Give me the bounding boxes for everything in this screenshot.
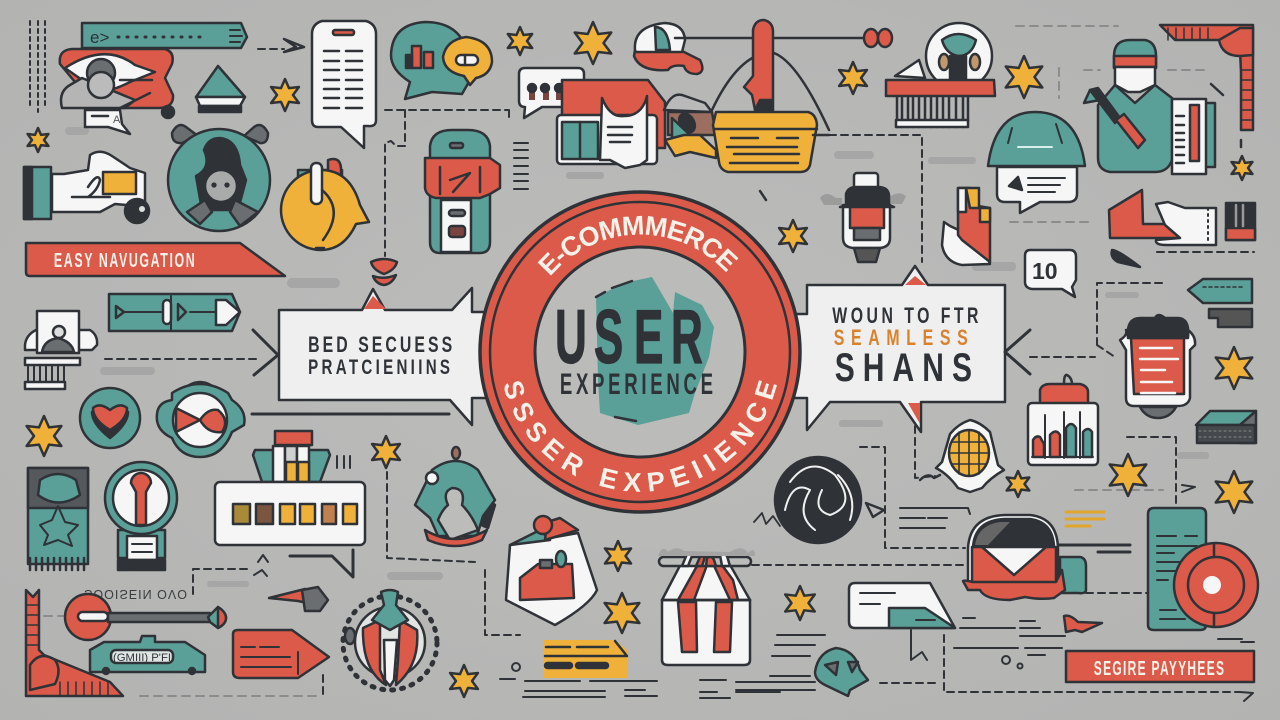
icon: grey smudge above gift bbox=[658, 548, 755, 556]
icon: red bow bbox=[1064, 616, 1102, 632]
icon: short text lines right of ball bbox=[900, 508, 970, 528]
right callout: seamless bbox=[785, 266, 1030, 432]
badge inner ring line bbox=[490, 202, 790, 502]
icon: small arrows right bbox=[1182, 485, 1254, 701]
icon: match stick bbox=[65, 594, 226, 640]
upside-down text: SOOISEIN OVO bbox=[84, 587, 187, 601]
icon: envelope dome bbox=[963, 515, 1130, 600]
icon: red hand bbox=[942, 188, 990, 265]
left callout: best practices bbox=[252, 288, 495, 425]
icon: yellow lines bbox=[1066, 512, 1104, 526]
icon: teal helmet bubble bbox=[988, 112, 1085, 213]
icon: yellow card bbox=[544, 640, 627, 678]
curved title: E-COMMMERCE: E-COMMMERCE bbox=[538, 216, 738, 276]
icon: document speech bubble bbox=[312, 21, 376, 148]
text lines near bottom right bbox=[954, 618, 1065, 668]
icon: pair of red ovals bbox=[864, 29, 892, 47]
icon: teal search bar bbox=[82, 23, 247, 48]
icon: dark yarn ball bbox=[754, 457, 884, 543]
banner: secure payments bbox=[1066, 651, 1254, 682]
left callout: best practices: PRATCIENIINS bbox=[308, 354, 450, 379]
badge centre disc bbox=[535, 247, 745, 457]
icon: globe ornament bbox=[920, 420, 1004, 492]
right callout: seamless: WOUN TO FTR bbox=[832, 305, 979, 329]
icon: small smudge figure bbox=[345, 628, 355, 644]
left callout: best practices: BED SECUESS bbox=[308, 334, 452, 358]
icon: right hand with card bbox=[1109, 190, 1255, 245]
blob dashes bbox=[596, 281, 636, 421]
icon: target face bbox=[157, 382, 244, 457]
icon: red dial bbox=[1174, 543, 1258, 627]
icon: chat bubble with bars bbox=[391, 22, 492, 99]
icon: red mixer bbox=[1120, 315, 1195, 418]
icon: storefront bbox=[557, 80, 665, 168]
banner: secure payments: SEGIRE PAYYHEES bbox=[1094, 658, 1224, 680]
icon: radial target bbox=[343, 590, 437, 690]
banner: easy navigation bbox=[26, 243, 285, 276]
icon: red cap bbox=[634, 23, 865, 74]
icon: striped corner bottom left bbox=[26, 590, 123, 696]
icon: hand holding card bbox=[24, 152, 149, 223]
icon: ticket with arrows bbox=[109, 294, 240, 331]
icon: ruler panel bbox=[1172, 99, 1215, 174]
icon: avatar circle bbox=[168, 125, 270, 231]
icon: striped corner top right bbox=[1160, 25, 1253, 130]
central badge bbox=[478, 190, 802, 514]
icon: small carets bbox=[254, 555, 268, 576]
icon: market stall bbox=[253, 431, 350, 482]
grey accent pills bbox=[65, 127, 1209, 587]
icon: "10" bubble: 10 bbox=[1032, 258, 1058, 284]
icon: teal chip comb bbox=[1196, 411, 1256, 443]
icon: scarf bbox=[28, 468, 88, 570]
icon: gift striped bag bbox=[659, 553, 751, 665]
banner: easy navigation: EASY NAVUGATION bbox=[54, 249, 195, 272]
icon: speech bubble with pins bbox=[519, 68, 584, 118]
icon: stacked stripes bbox=[514, 143, 528, 189]
icon: white tag with teal bbox=[849, 583, 955, 660]
icon: small note bbox=[85, 110, 130, 134]
icon: food pile bbox=[664, 95, 716, 158]
right callout: seamless: SHANS bbox=[835, 346, 972, 390]
curved title: SSER EXPEIIENCE: SSSER EXPEIIENCE bbox=[504, 380, 777, 492]
icon: teal car bbox=[90, 636, 205, 674]
icon: teal apron figure bbox=[1084, 40, 1172, 172]
icon: dotted column pattern bbox=[30, 21, 45, 112]
icon: dark leaf bbox=[1112, 250, 1140, 267]
icon: teal tag with comb bbox=[1188, 279, 1252, 327]
icon: bar chart bag bbox=[1028, 375, 1098, 465]
icon: dash arrow head bbox=[284, 39, 304, 52]
right callout: seamless: SEAMLESS bbox=[834, 327, 968, 351]
icon: teal car: (GMIII) P'FI bbox=[113, 652, 171, 664]
heading: EXPERIENCE: EXPERIENCE bbox=[560, 368, 713, 401]
icon: "10" bubble bbox=[1025, 250, 1076, 297]
badge ring bbox=[480, 192, 800, 512]
icon: heart circle bbox=[80, 388, 140, 448]
icon: eye with person bbox=[60, 49, 174, 118]
icon: robot mixer bbox=[820, 173, 906, 262]
icon: bag with purse bbox=[506, 516, 597, 625]
icon: teal pyramid bbox=[196, 66, 245, 112]
icon: teal search bar: e> bbox=[90, 28, 109, 47]
icon: red tag bbox=[233, 630, 329, 678]
icon: marker bbox=[269, 587, 328, 611]
bottom text lines bbox=[500, 635, 825, 698]
icon: teal document bbox=[1148, 508, 1206, 630]
icon: teal globe badge bbox=[815, 648, 868, 696]
icon: person with comb bbox=[25, 311, 97, 389]
icon: red heart connector bbox=[371, 259, 397, 285]
icon: mushroom dome bbox=[886, 23, 995, 127]
icon: teal robot bbox=[415, 447, 495, 546]
heading: USER: USER bbox=[555, 296, 703, 380]
icon: yellow circle with toggle bbox=[281, 159, 369, 250]
icon: phone backpack bbox=[425, 130, 500, 253]
teal blob bbox=[596, 277, 714, 425]
icon: product list bubble bbox=[215, 482, 365, 577]
icon: small note: A bbox=[113, 114, 121, 126]
icon: small slashes bbox=[760, 84, 1241, 200]
icon: yellow shopping basket bbox=[712, 20, 829, 172]
icon: keyhole gauge bbox=[105, 462, 177, 570]
